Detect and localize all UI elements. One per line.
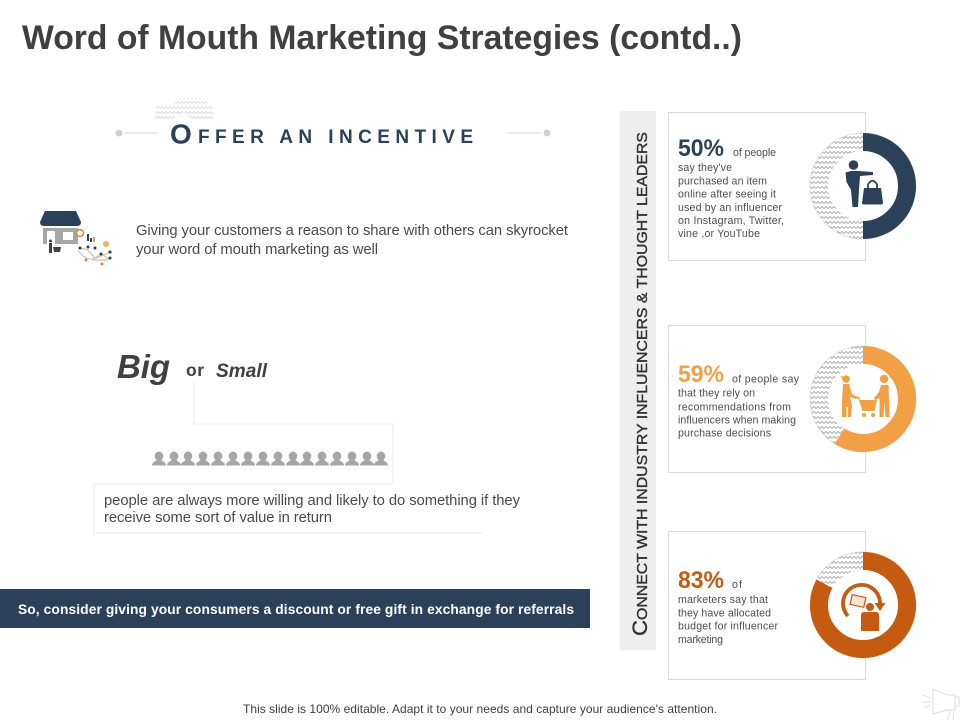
footer note: This slide is 100% editable. Adapt it to your needs and capture your audience's attention. — [243, 702, 717, 716]
title: Word of Mouth Marketing Strategies (contd..) — [22, 19, 742, 57]
icon: megaphone — [922, 689, 959, 720]
stat text: 83 percent — [678, 567, 778, 646]
stat text: 59 percent: purchase decisions — [678, 428, 771, 440]
section heading: offer an incentive — [116, 98, 550, 150]
big or small label: Big — [117, 348, 170, 385]
panel: 59% stat — [668, 326, 916, 472]
donut chart: 59 percent — [810, 346, 916, 452]
stat text: 83 percent: marketers say that — [678, 594, 768, 606]
text block: people are more willing — [104, 493, 521, 526]
big or small label: Small — [216, 361, 268, 382]
stat text: 59 percent: influencers when making — [678, 414, 796, 426]
big or small label: or — [186, 360, 204, 380]
icon: store with shopper and network — [40, 211, 112, 266]
icon: person with money cycle — [843, 585, 886, 631]
text block: giving customers a reason: Giving your customers a reason to share with others can skyrocket — [136, 223, 568, 239]
text block: giving customers a reason: your word of mouth marketing as well — [136, 242, 378, 258]
stat text: 50 percent: vine ,or YouTube — [678, 228, 760, 240]
vertical band: connect with influencers — [620, 111, 656, 650]
stat text: 83 percent: 83% — [678, 567, 724, 594]
stat text: 50 percent: used by an influencer — [678, 202, 782, 214]
text block: people are more willing: people are always more willing and likely to do something if they — [104, 493, 521, 509]
stat text: 50 percent: say they've — [678, 162, 732, 174]
stat text: 83 percent: marketing — [678, 634, 723, 646]
stat text: 83 percent: they have allocated — [678, 608, 771, 620]
banner: consider discount: So, consider giving your consumers a discount or free gift in exchange for referrals — [18, 602, 574, 617]
donut chart: 83 percent — [810, 552, 916, 658]
panel: 83% stat — [668, 532, 916, 680]
text block: giving customers a reason — [136, 223, 568, 258]
stat text: 50 percent: 50% — [678, 135, 724, 162]
stat text: 50 percent: purchased an item — [678, 176, 767, 188]
section heading: offer an incentive: O — [170, 118, 192, 150]
stat text: 83 percent: budget for influencer — [678, 620, 778, 632]
icon row: audience people — [152, 452, 388, 466]
big or small label — [117, 348, 268, 385]
text block: people are more willing: receive some sort of value in return — [104, 510, 332, 526]
panel: 50% stat — [668, 112, 916, 260]
decorative zigzag cloud — [155, 98, 213, 119]
stat text: 50 percent: on Instagram, Twitter, — [678, 215, 784, 227]
stat text: 59 percent: recommendations from — [678, 402, 791, 414]
icon: two people with cart — [840, 375, 890, 417]
icon: person with shopping bag — [846, 160, 883, 207]
stat text: 59 percent — [678, 361, 800, 440]
vertical band: connect with influencers: CONNECT WITH INDUSTRY INFLUENCERS & THOUGHT LEADERS — [629, 132, 652, 636]
section heading: offer an incentive: FFER AN INCENTIVE — [198, 127, 473, 148]
stat text: 59 percent: 59% — [678, 361, 724, 388]
donut chart: 50 percent — [810, 133, 916, 239]
stat text: 50 percent: of people — [733, 147, 776, 159]
stat text: 50 percent: online after seeing it — [678, 188, 776, 200]
connector frame lines — [94, 382, 483, 533]
stat text: 83 percent: of — [732, 579, 742, 591]
stat text: 59 percent: of people say — [732, 374, 800, 386]
stat text: 50 percent — [678, 135, 784, 240]
stat text: 59 percent: that they rely on — [678, 388, 755, 400]
banner: consider discount — [0, 589, 590, 628]
